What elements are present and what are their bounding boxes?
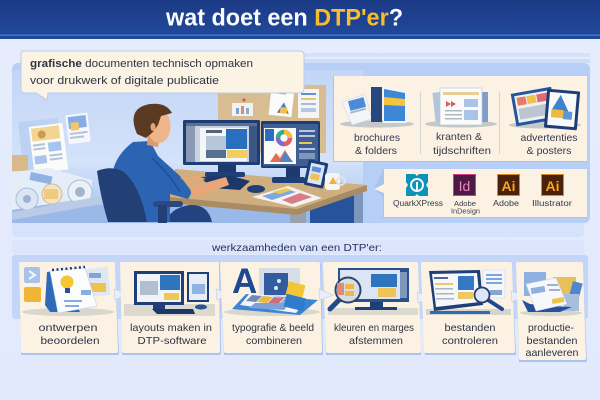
label [232,322,314,347]
icon: InDesign [454,174,476,196]
icon: monitor and tablet [124,271,215,316]
icon: stack of print files [520,272,583,316]
icon: Illustrator Ai: Ai [546,178,560,194]
section heading: werkzaamheden van een DTP'er: [211,242,382,254]
label: typografie & beeld [232,322,314,334]
callout: definition [21,51,304,100]
illustration: right monitor [261,121,320,183]
label: Adobe: Adobe [493,199,520,208]
illustration: left monitor [183,120,260,177]
label: controleren [442,335,498,347]
arrow: step 2 to 3 [216,289,230,300]
arrow: step 4 to 5 [417,292,431,303]
label: Adobe InDesign: InDesign [451,208,480,216]
label: afstemmen [349,335,403,347]
text: newspapers: tijdschriften [433,145,491,157]
label: Adobe InDesign [451,201,480,216]
label [334,322,414,347]
label: layouts maken in [130,322,212,334]
card: kleuren en marges [323,262,421,355]
arrow: step 1 to 2 [114,289,128,300]
callout: definition: voor drukwerk of digitale publicatie [30,75,219,87]
chair [97,168,183,223]
label: beoordelen [40,335,100,347]
text: ads and posters [520,132,578,157]
label: combineren [246,335,302,347]
icon: ads and posters [509,87,581,130]
legs [166,205,212,222]
arrow: step 5 to 6 [511,291,525,302]
icon: Adobe Ai: Ai [502,178,516,194]
panel: output types [333,76,587,162]
label: aanleveren [526,347,579,359]
illustration: designer at computer [97,104,229,223]
callout: definition: grafische documenten technisch opmaken [30,58,253,70]
header banner [0,0,600,39]
label [38,322,100,347]
label [130,322,212,347]
icon: Illustrator Ai [542,174,564,196]
illustration: desk [168,169,367,223]
card: bestanden controleren [421,262,516,355]
text: ads and posters: advertenties [520,132,578,144]
arms [190,177,229,198]
arrow: step 3 to 4 [319,289,333,300]
text: brochures: brochures [354,132,400,144]
illustration: keyboard, mouse and colour swatches [200,176,322,207]
icon: Adobe Ai [498,174,520,196]
label: productie- [528,322,574,334]
icon: QuarkXPress [406,174,428,196]
label: kleuren en marges [334,322,414,334]
text: newspapers [433,131,491,157]
title: wat doet een DTP'er? [165,4,403,32]
card: typografie en beeld [220,262,323,355]
label: bestanden [526,335,578,347]
label: Illustrator: Illustrator [532,199,572,208]
label: ontwerpen [38,322,98,334]
panel: software tools [374,169,587,218]
section heading [12,240,584,254]
label [526,322,579,359]
torso [112,141,192,222]
task strip background [12,255,588,319]
label: QuarkXPress: QuarkXPress [393,199,443,208]
icon: monitor with magnifier [328,268,418,315]
label [442,322,498,347]
card: ontwerpen beoordelen [19,262,119,355]
label: bestanden [444,322,496,334]
text: ads and posters: & posters [526,145,572,157]
icon: InDesign: Id [459,178,470,194]
label: Adobe InDesign: Adobe [454,201,476,208]
illustration: cork pinboard [218,85,326,153]
icon: screen with magnifier [426,270,511,315]
card: productiebestanden aanleveren [516,262,587,362]
icon: brochures [340,86,414,128]
text: brochures [354,132,400,157]
label: DTP-software [138,335,207,347]
panel: scene background [12,53,590,237]
illustration: print documents and paper rolls [12,113,102,220]
text: newspapers: kranten & [436,131,482,143]
text: brochures: & folders [355,145,397,157]
head [134,104,172,147]
icon: newspapers [425,88,497,128]
card: layouts maken [120,262,221,355]
icon: typography and swatches: A [232,262,257,301]
illustration: tablet and mug [304,159,345,190]
icon: notebook with light bulb [22,267,114,316]
